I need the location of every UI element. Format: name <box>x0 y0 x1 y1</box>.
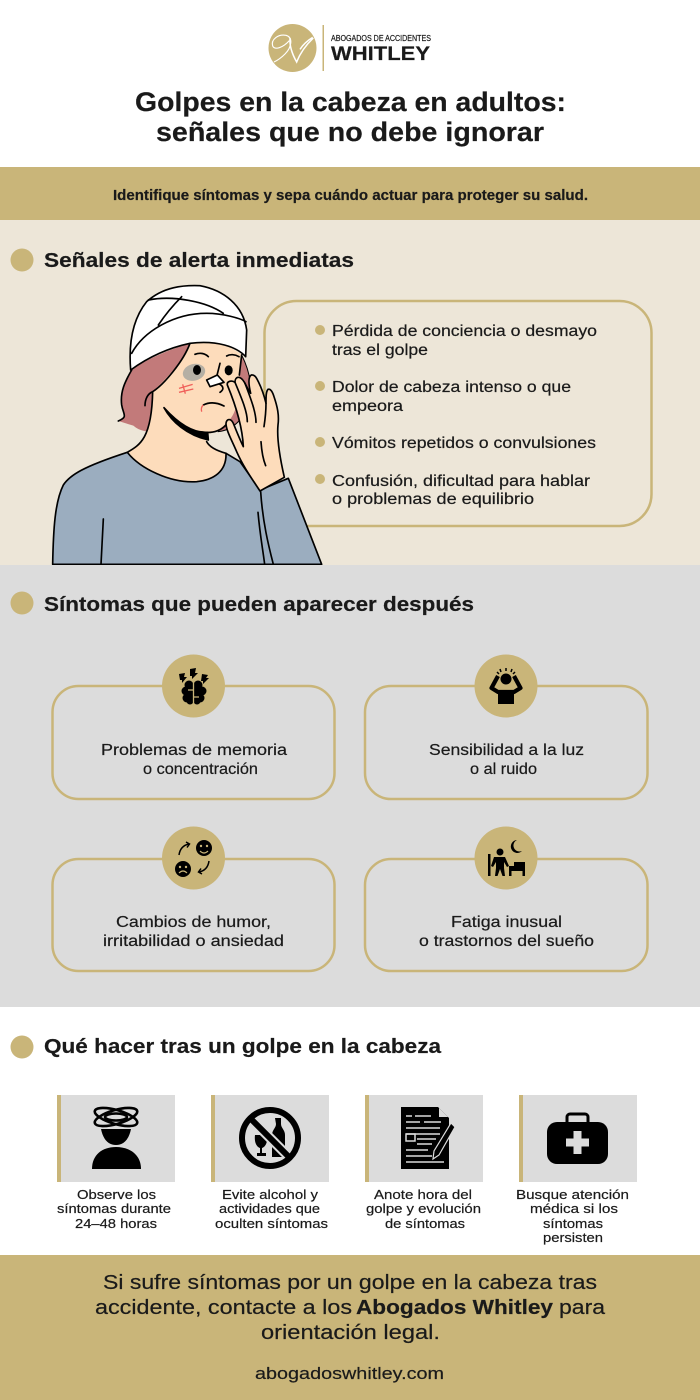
panel: delayed symptoms <box>0 565 700 1007</box>
title: señales que no debe ignorar <box>156 117 545 147</box>
bullet: confusion: o problemas de equilibrio <box>332 491 534 508</box>
icon: no alcohol <box>242 1110 298 1166</box>
step: seek medical care: médica si los <box>530 1201 619 1216</box>
callout: alert signs list <box>264 301 652 526</box>
subtitle band: Identifique síntomas y sepa cuándo actuar para proteger su salud. <box>113 188 588 204</box>
subtitle band <box>0 167 700 220</box>
step: observe symptoms: Observe los <box>77 1187 157 1202</box>
footer call to action: orientación legal. <box>261 1321 440 1344</box>
step: avoid alcohol: Evite alcohol y <box>222 1187 319 1202</box>
card: mood changes <box>52 826 334 971</box>
step: observe symptoms: 24–48 horas <box>75 1216 158 1231</box>
card: light and noise sensitivity <box>365 654 648 799</box>
heading: what to do: Qué hacer tras un golpe en la cabeza <box>44 1035 442 1058</box>
bullet: confusion: Confusión, dificultad para hablar <box>332 473 590 490</box>
step: avoid alcohol: actividades que <box>219 1201 320 1216</box>
step: seek medical care: persisten <box>543 1230 603 1245</box>
step: write down time: de síntomas <box>385 1216 466 1231</box>
heading: delayed symptoms: Síntomas que pueden aparecer después <box>44 593 474 616</box>
card: memory problems <box>52 654 334 799</box>
logo: ABOGADOS DE ACCIDENTES <box>331 34 431 43</box>
footer call to action: abogadoswhitley.com <box>255 1364 444 1383</box>
bullet: headache <box>315 379 571 415</box>
step: write down time <box>365 1095 483 1231</box>
icon: mood swing faces <box>175 840 212 877</box>
step: observe symptoms: síntomas durante <box>57 1201 171 1216</box>
card: fatigue and sleep disorders <box>365 826 648 971</box>
icon: dizzy person <box>92 1104 141 1169</box>
panel: immediate alert signs <box>0 220 700 565</box>
card: light and noise sensitivity: Sensibilidad a la luz <box>429 742 584 759</box>
card: fatigue and sleep disorders: Fatiga inusual <box>451 914 562 931</box>
logo: WHITLEY <box>331 44 430 65</box>
logo <box>268 24 431 72</box>
title <box>135 87 566 147</box>
footer call to action: para <box>559 1296 606 1319</box>
bullet: vomiting: Vómitos repetidos o convulsiones <box>332 435 596 452</box>
icon: person holding head <box>492 668 520 704</box>
step: seek medical care: síntomas <box>543 1216 604 1231</box>
card: mood changes: irritabilidad o ansiedad <box>103 933 284 950</box>
icon: document and pencil <box>401 1107 455 1169</box>
step: avoid alcohol <box>211 1095 329 1231</box>
card: mood changes: Cambios de humor, <box>116 914 271 931</box>
heading: immediate alert signs: Señales de alerta inmediatas <box>44 249 354 272</box>
card: memory problems: Problemas de memoria <box>101 742 287 759</box>
footer call to action: accidente, contacte a los <box>95 1296 352 1319</box>
icon: first aid kit <box>547 1114 608 1164</box>
bullet: loss of consciousness <box>315 323 597 359</box>
footer call to action: Abogados Whitley <box>356 1296 554 1319</box>
title: Golpes en la cabeza en adultos: <box>135 87 566 117</box>
step: avoid alcohol: oculten síntomas <box>215 1216 329 1231</box>
bullet: headache: Dolor de cabeza intenso o que <box>332 379 571 396</box>
bullet: confusion <box>315 473 590 508</box>
card: light and noise sensitivity: o al ruido <box>470 761 537 778</box>
bullet: headache: empeora <box>332 398 403 415</box>
footer call to action: Si sufre síntomas por un golpe en la cabeza tras <box>103 1271 597 1294</box>
bullet: loss of consciousness: tras el golpe <box>332 342 428 359</box>
step: write down time: Anote hora del <box>374 1187 472 1202</box>
card: fatigue and sleep disorders: o trastornos del sueño <box>419 933 594 950</box>
step: write down time: golpe y evolución <box>366 1201 481 1216</box>
icon: tired person by bed with moon <box>488 840 525 876</box>
illustration: injured woman with bandaged head <box>53 286 322 564</box>
footer call to action <box>0 1255 700 1400</box>
panel: what to do after a blow <box>10 1035 637 1245</box>
icon: brain with lightning bolts <box>179 668 209 704</box>
step: observe symptoms <box>57 1095 175 1231</box>
card: memory problems: o concentración <box>143 761 258 778</box>
bullet: loss of consciousness: Pérdida de conciencia o desmayo <box>332 323 597 340</box>
step: seek medical care: Busque atención <box>516 1187 629 1202</box>
step: seek medical care <box>516 1095 637 1245</box>
